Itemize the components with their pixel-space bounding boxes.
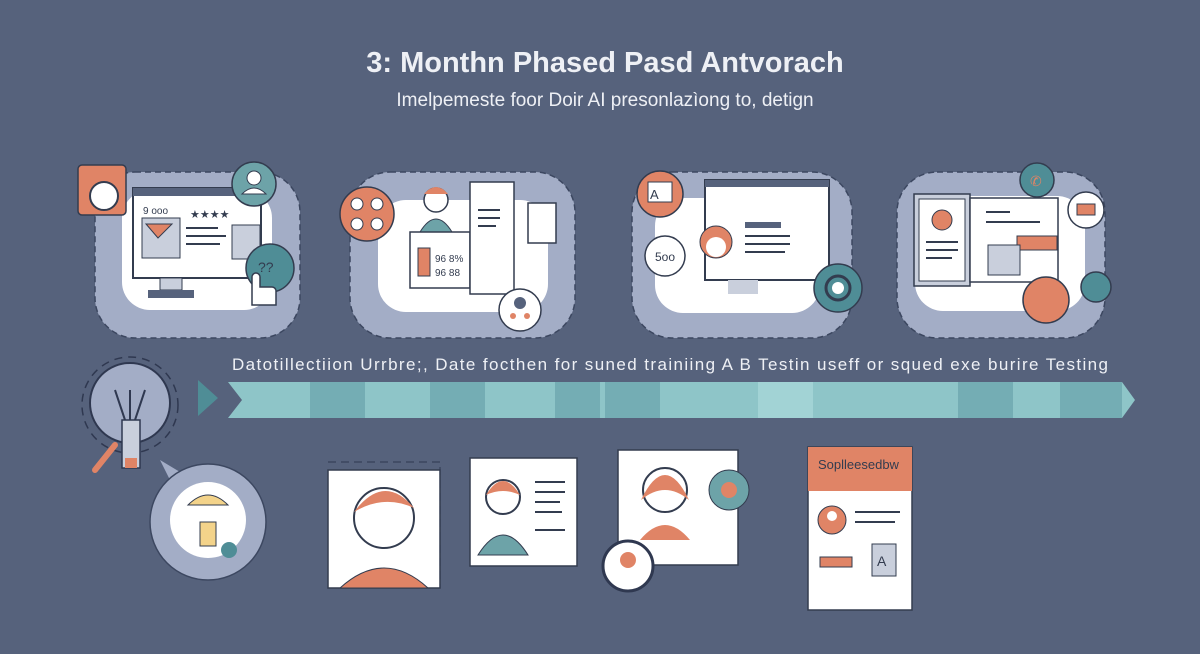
icon: orange network (1023, 272, 1111, 323)
timeline bar (228, 382, 1135, 418)
icon: monitor with person (700, 180, 829, 294)
title: 3: Monthn Phased Pasd Antvorach (366, 47, 844, 79)
icon: user bubble (232, 162, 276, 206)
icon: gear question (246, 244, 294, 305)
icon: 500 bubble (645, 236, 685, 276)
card: profile 4: A (877, 553, 887, 569)
icon: card bubble (1068, 192, 1104, 228)
icon: person with docs (410, 182, 556, 331)
icon: A bubble: A (650, 187, 659, 202)
card: profile 4: Soplleesedbw (818, 457, 900, 472)
icon: monitor (133, 188, 261, 298)
icon: person with docs: 96 8% (435, 254, 463, 265)
timeline labels: Datotillectiion Urrbre;, Date focthen for suned trainiing A B Testin useff or squed exe burire Testing (232, 355, 1108, 374)
icon: A bubble (637, 171, 683, 217)
icon: start arrow (198, 380, 218, 416)
panel: phase 2 (340, 172, 575, 338)
panel: phase 4 (897, 163, 1111, 338)
icon: person with docs: 96 88 (435, 268, 460, 279)
panel: phase 1 (78, 162, 300, 338)
card: face 1 (328, 462, 440, 588)
panel: phase 3 (632, 171, 862, 338)
icon: clock badge (78, 165, 126, 215)
icon: speech circle (150, 460, 266, 580)
icon: 500 bubble: 5oo (655, 250, 675, 264)
icon: gear (814, 264, 862, 312)
icon: monitor: 9 ooo (143, 206, 168, 217)
card: person 2 (470, 458, 577, 566)
subtitle: Imelpemeste foor Doir AI presonlazìong to, detign (396, 90, 814, 111)
card: profile 4 (808, 447, 912, 610)
card: person 3 (603, 450, 749, 591)
icon: network circle (340, 187, 394, 241)
icon: gear question: ?? (258, 259, 274, 275)
icon: lightbulb (82, 357, 178, 470)
icon: phone bubble: ✆ (1030, 173, 1042, 189)
icon: monitor: ★★★★ (190, 209, 230, 221)
icon: document pages (914, 194, 1058, 286)
icon: phone bubble (1020, 163, 1054, 197)
